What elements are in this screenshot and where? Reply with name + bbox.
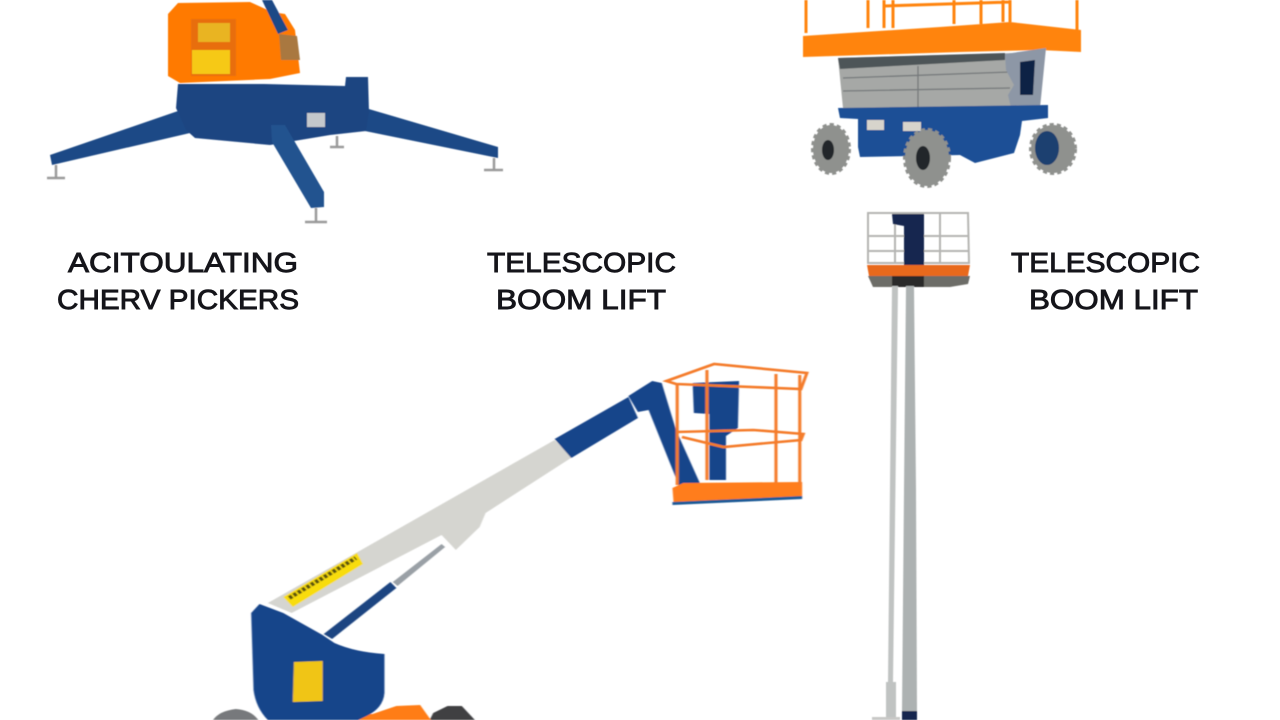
- blue chassis: [838, 105, 1048, 163]
- warning label bottom: [192, 50, 230, 74]
- blue mast head: [892, 214, 924, 265]
- wheel: left: [813, 125, 849, 173]
- heading: telescopic boom lift centre: TELESCOPIC: [487, 247, 676, 278]
- heading: telescopic boom lift right: [1011, 247, 1200, 315]
- scissor stack: [838, 53, 1020, 110]
- control console: [693, 381, 739, 480]
- icon: telescopic boom lift: [213, 364, 807, 720]
- orange cab: [168, 2, 300, 83]
- wide mast: [902, 286, 917, 712]
- thin mast: [886, 286, 898, 720]
- warning label top: [198, 23, 230, 42]
- grey basket railing: [868, 213, 969, 263]
- wheel: front: [905, 130, 949, 186]
- outrigger: front: [271, 125, 324, 208]
- blue upper boom: [555, 397, 638, 458]
- warning label panel: [191, 19, 236, 76]
- heading: articulating cherry pickers: CHERV PICKERS: [57, 284, 299, 315]
- basket floor: [672, 482, 802, 503]
- heading: telescopic boom lift right: BOOM LIFT: [1029, 284, 1198, 315]
- stack dark edge: [1005, 48, 1046, 112]
- orange platform: [867, 265, 970, 276]
- orange platform deck: [803, 22, 1081, 57]
- heading: telescopic boom lift centre: BOOM LIFT: [496, 284, 666, 315]
- heading: articulating cherry pickers: ACITOULATING: [68, 247, 298, 278]
- hydraulic cylinder: [324, 582, 396, 639]
- hydraulic cylinder rod: [393, 544, 445, 586]
- wheel: right: [1031, 125, 1075, 173]
- icon: vertical mast lift: [867, 213, 970, 720]
- dark bracket: [892, 276, 924, 287]
- heading: telescopic boom lift right: TELESCOPIC: [1011, 247, 1200, 278]
- mast foot: [902, 711, 917, 720]
- cab boom arm: [262, 0, 288, 34]
- chassis labels: [867, 120, 884, 130]
- icon: scissor lift: [803, 0, 1081, 186]
- outrigger: left: [50, 111, 190, 165]
- heading: articulating cherry pickers: [57, 247, 299, 315]
- grey boom: [268, 440, 572, 613]
- blue chassis: [176, 77, 369, 145]
- heading: telescopic boom lift centre: [487, 247, 676, 315]
- yellow base label: [293, 661, 323, 702]
- silver badge: [307, 113, 325, 127]
- platform underside: [868, 276, 970, 287]
- outrigger: right: [360, 107, 498, 158]
- blue jib: [628, 381, 700, 487]
- wheels: [213, 709, 258, 720]
- platform railing: [806, 0, 1077, 33]
- orange basket railing: [666, 364, 807, 485]
- orange base: [267, 705, 431, 720]
- foot pads: [47, 136, 503, 222]
- icon: articulating lift base with outriggers: [47, 0, 503, 222]
- blue base cowl: [251, 604, 384, 720]
- yellow boom decal: [283, 553, 363, 607]
